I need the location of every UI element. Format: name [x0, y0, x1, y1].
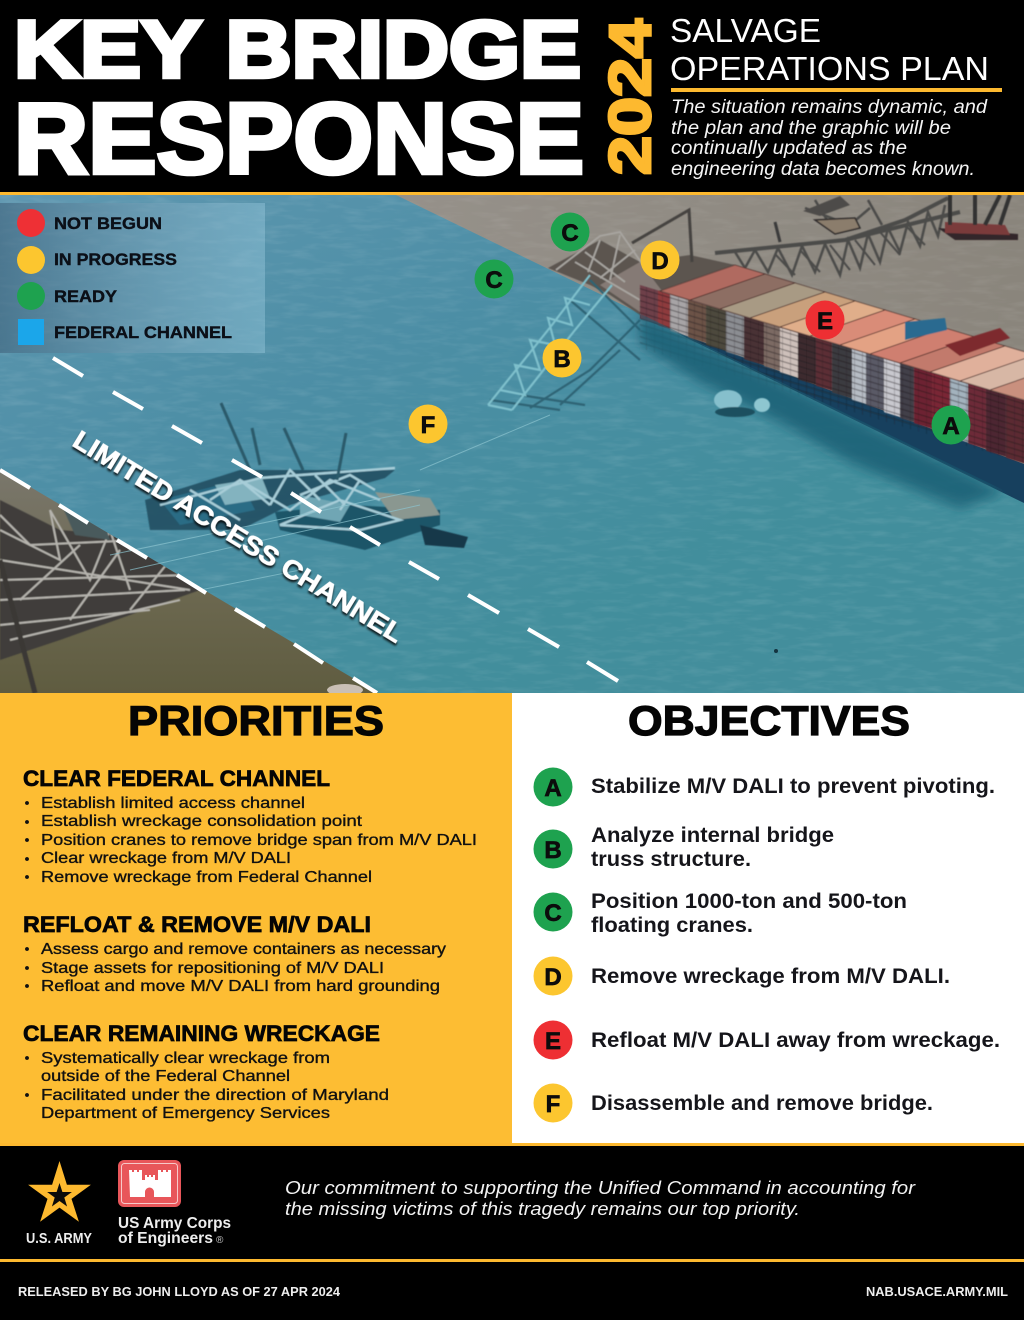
ship shadow on water [640, 313, 1004, 508]
subtitle: Salvage Operations Plan: SALVAGE [670, 12, 821, 49]
situation note: The situation remains dynamic, and [671, 97, 988, 118]
priority group: clear remaining wreckage: Department of Emergency Services [41, 1105, 330, 1122]
commitment statement: Our commitment to supporting the Unified Command in accounting for [285, 1178, 916, 1198]
priority group: clear federal channel: CLEAR FEDERAL CHANNEL [23, 766, 330, 791]
logo: U.S. Army star: U.S. ARMY [26, 1230, 92, 1247]
priority group: refloat and remove: Stage assets for repositioning of M/V DALI [41, 960, 384, 977]
logo: US Army Corps of Engineers castle: ® [216, 1235, 224, 1246]
objective C: floating cranes. [591, 914, 753, 937]
logo: US Army Corps of Engineers castle [118, 1160, 231, 1247]
marker D in progress: D [651, 248, 669, 275]
priority group: clear remaining wreckage: Systematically clear wreckage from [41, 1050, 330, 1067]
legend: federal channel: FEDERAL CHANNEL [54, 323, 232, 342]
priority group: clear federal channel: Establish wreckage consolidation point [41, 813, 363, 830]
priority group: refloat and remove [23, 912, 446, 995]
objectives heading: OBJECTIVES [628, 697, 910, 744]
fallen truss in channel [488, 275, 640, 410]
ship bow with wreckage [548, 210, 735, 315]
priority group: clear federal channel: Clear wreckage from M/V DALI [41, 850, 291, 867]
legend: federal channel [18, 319, 232, 345]
marker A ready: A [942, 413, 960, 440]
priority group: clear federal channel [23, 766, 477, 886]
aerial photo map [0, 195, 1024, 696]
marker C ready left: C [485, 267, 503, 294]
objective E: E [545, 1028, 561, 1055]
objective D: D [544, 964, 562, 991]
marker B in progress: B [553, 346, 571, 373]
title: Key Bridge Response: RESPONSE [14, 83, 584, 195]
priority group: refloat and remove: REFLOAT & REMOVE M/V DALI [23, 912, 371, 937]
tug beside ship [714, 390, 770, 417]
federal channel limit dashes [0, 358, 618, 693]
title: Key Bridge Response [14, 5, 584, 195]
priority group: refloat and remove: Assess cargo and remove containers as necessary [41, 941, 446, 958]
footer [0, 1143, 1024, 1320]
grey water outside channel [396, 195, 1024, 464]
legend [0, 203, 265, 353]
title: Key Bridge Response: KEY BRIDGE [14, 5, 581, 95]
objective B: B [544, 837, 562, 864]
marker A ready [932, 406, 970, 444]
objective B: Analyze internal bridge [591, 824, 834, 847]
wreckage barges and cranes [145, 403, 468, 550]
objective A: Stabilize M/V DALI to prevent pivoting. [591, 775, 995, 798]
objective C: C [544, 900, 562, 927]
objective C: Position 1000-ton and 500-ton [591, 890, 907, 913]
legend: ready: READY [54, 287, 118, 306]
objective D [534, 956, 950, 996]
commitment statement [285, 1178, 916, 1219]
panel: objectives [512, 693, 1024, 1145]
marker B in progress [542, 338, 582, 378]
year 2024 vertical: 2024 [598, 19, 663, 175]
objective F: F [546, 1091, 560, 1118]
marker D in progress [640, 240, 680, 280]
logo: US Army Corps of Engineers castle: of Engineers [118, 1230, 213, 1247]
subtitle: Salvage Operations Plan [670, 12, 989, 87]
marker F in progress [408, 404, 448, 444]
objective E [534, 1020, 1000, 1060]
marker C ready top: C [561, 220, 579, 247]
objective C [534, 890, 907, 937]
legend: ready [17, 282, 118, 310]
priority group: clear remaining wreckage [23, 1021, 389, 1122]
marker C ready top [550, 212, 590, 252]
priority group: clear federal channel: Establish limited access channel [41, 795, 305, 812]
subtitle rule [671, 88, 1002, 92]
ship hull [640, 315, 1024, 503]
situation note [671, 97, 988, 180]
legend: not begun: NOT BEGUN [54, 214, 162, 233]
objective D: Remove wreckage from M/V DALI. [591, 965, 950, 988]
priority group: clear remaining wreckage: outside of the Federal Channel [41, 1068, 290, 1085]
header [14, 5, 1002, 195]
limited access channel label: LIMITED ACCESS CHANNEL [68, 425, 409, 649]
priority group: clear federal channel: Position cranes to remove bridge span from M/V DALI [41, 832, 477, 849]
panel: priorities [0, 693, 512, 1145]
specks [774, 649, 778, 653]
ship container sides [640, 285, 1024, 464]
objective A [534, 768, 995, 806]
website: NAB.USACE.ARMY.MIL [866, 1284, 1008, 1299]
legend: not begun [17, 209, 162, 237]
logo: U.S. Army star [26, 1161, 92, 1247]
objective E: Refloat M/V DALI away from wreckage. [591, 1029, 1000, 1052]
objective B [534, 824, 834, 871]
ship container tops [660, 265, 1024, 400]
marker C ready left [474, 260, 514, 298]
water ripples [0, 195, 1024, 693]
boat at lower edge [327, 684, 363, 693]
water: federal channel [0, 195, 1024, 693]
submerged lines [110, 415, 550, 590]
header gold rule [0, 192, 1024, 195]
near bridge span on left [0, 490, 205, 693]
footer gold rules [0, 1144, 1024, 1260]
objective B: truss structure. [591, 848, 751, 871]
marker E not begun [806, 300, 844, 340]
far bridge span and cranes [715, 195, 1018, 275]
objective F [534, 1084, 933, 1122]
marker E not begun: E [817, 308, 833, 335]
legend: in progress: IN PROGRESS [54, 250, 177, 269]
situation note: the plan and the graphic will be [671, 118, 951, 139]
situation note: engineering data becomes known. [671, 159, 975, 180]
subtitle: Salvage Operations Plan: OPERATIONS PLAN [670, 50, 989, 87]
objective F: Disassemble and remove bridge. [591, 1092, 933, 1115]
release line: RELEASED BY BG JOHN LLOYD AS OF 27 APR 2024 [18, 1284, 341, 1299]
logo: US Army Corps of Engineers castle: US Army Corps [118, 1215, 231, 1232]
legend: in progress [17, 246, 177, 274]
priority group: clear remaining wreckage: CLEAR REMAINING WRECKAGE [23, 1021, 380, 1046]
land-side water outside channel [0, 469, 378, 693]
priorities heading: PRIORITIES [128, 697, 384, 744]
commitment statement: the missing victims of this tragedy remains our top priority. [285, 1199, 800, 1219]
marker F in progress: F [421, 412, 435, 439]
priority group: clear remaining wreckage: Facilitated under the direction of Maryland [41, 1087, 389, 1104]
objective A: A [544, 775, 562, 802]
priority group: refloat and remove: Refloat and move M/V DALI from hard grounding [41, 978, 440, 995]
situation note: continually updated as the [671, 138, 907, 159]
priority group: clear federal channel: Remove wreckage from Federal Channel [41, 869, 372, 886]
